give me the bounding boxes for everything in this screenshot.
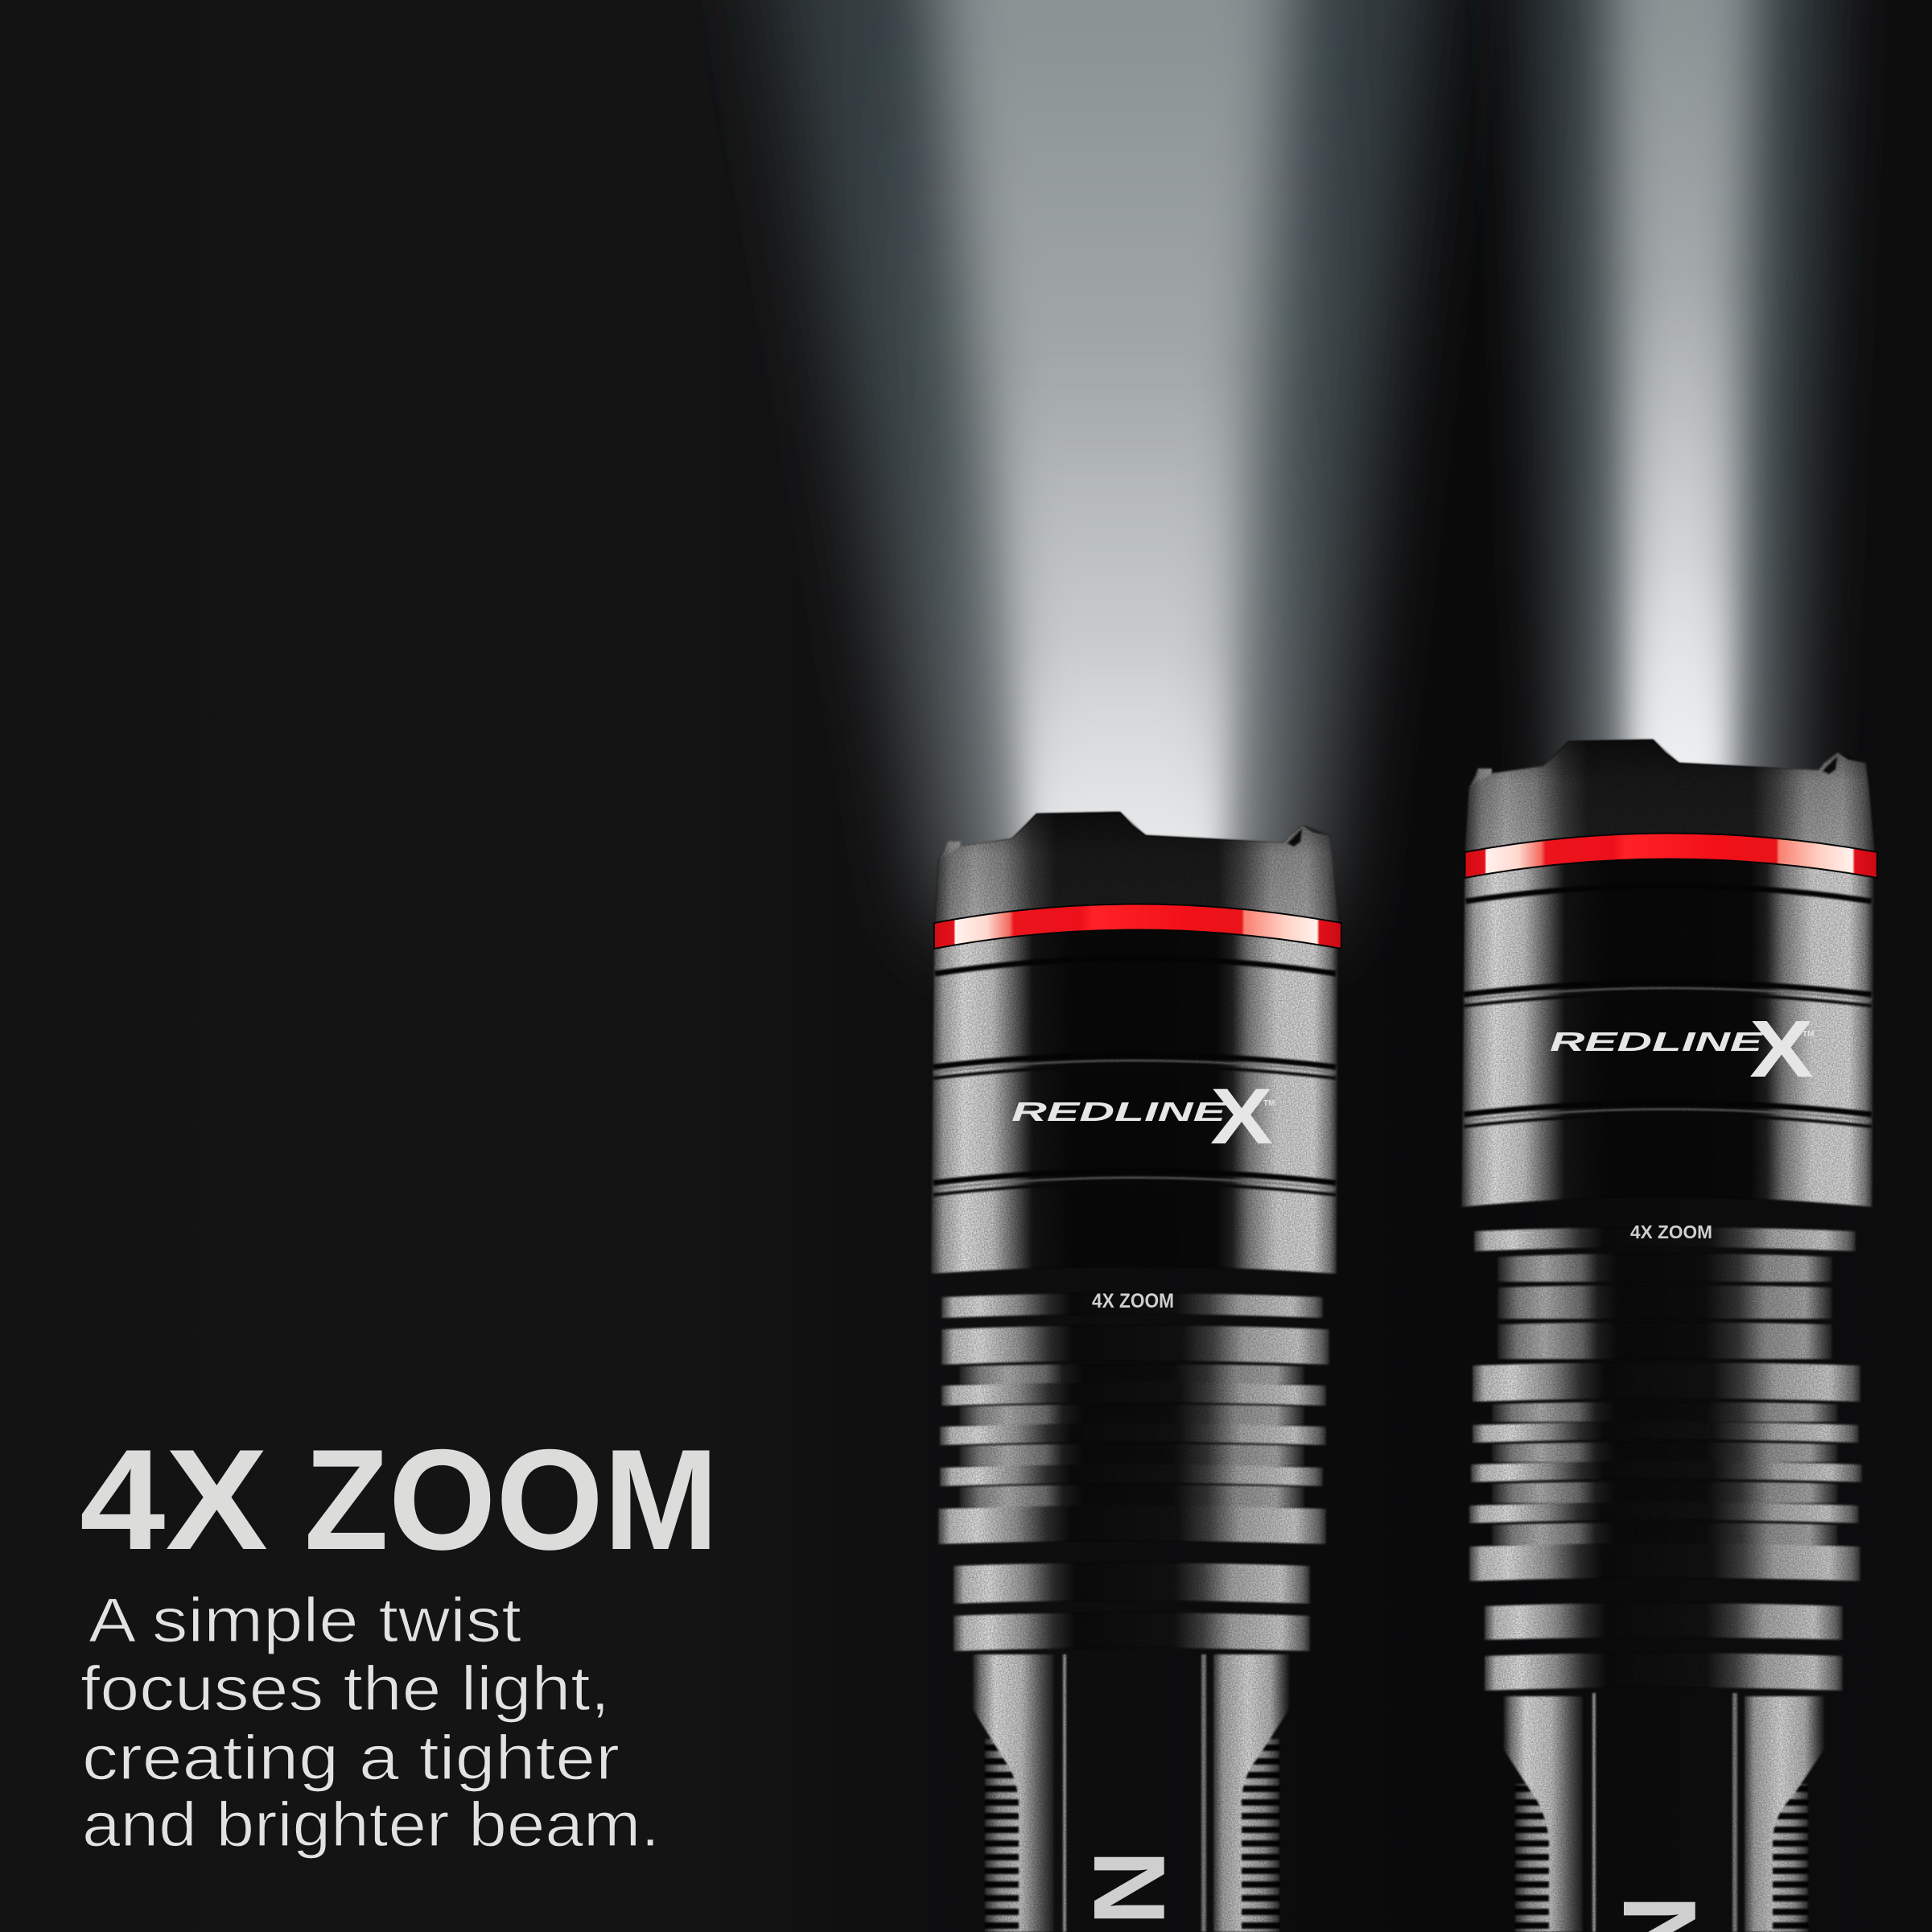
- body text: A simple twist: [89, 1584, 521, 1655]
- brand mark on handle: left: N: [1073, 1850, 1186, 1926]
- logo: REDLINE X, right: X: [1749, 1004, 1814, 1094]
- title: ZOOM: [304, 1419, 719, 1580]
- body text: focuses the light,: [80, 1653, 610, 1724]
- flashlight: right, focused beam: [1461, 739, 1877, 1932]
- flashlight head: right: [1461, 739, 1876, 1207]
- flashlight head: left: [931, 812, 1340, 1274]
- head grooves: right: [1464, 886, 1872, 1127]
- light beam: focused flashlight: [1513, 0, 1847, 845]
- head grooves: left: [933, 958, 1336, 1195]
- logo: REDLINE X, right: TM: [1802, 1030, 1814, 1039]
- logo: REDLINE X, left: X: [1210, 1072, 1273, 1160]
- red ring: left: [934, 904, 1341, 949]
- title: [80, 1419, 719, 1580]
- light beam: wide flashlight: [728, 0, 1464, 925]
- handle grip bars: right: [1503, 1693, 1825, 1932]
- body text: and brighter beam.: [82, 1789, 660, 1860]
- engraved label: 4X ZOOM, left: 4X ZOOM: [1092, 1290, 1174, 1312]
- engraved label: 4X ZOOM, right: 4X ZOOM: [1630, 1221, 1712, 1242]
- logo: REDLINE X, left: [1011, 1072, 1275, 1160]
- red ring: right: [1465, 834, 1877, 878]
- title: 4X: [80, 1419, 268, 1580]
- logo: REDLINE X, right: REDLINE: [1550, 1027, 1764, 1057]
- body text: [80, 1584, 660, 1860]
- handle grip bars: left: [972, 1654, 1290, 1932]
- handle knurling: right: [1515, 1784, 1808, 1932]
- ribbed collar: right: [1469, 1227, 1862, 1691]
- logo: REDLINE X, left: TM: [1263, 1099, 1275, 1108]
- body text: creating a tighter: [82, 1722, 620, 1793]
- ribbed collar: left: [938, 1293, 1329, 1651]
- handle knurling: left: [985, 1739, 1279, 1932]
- logo: REDLINE X, left: REDLINE: [1011, 1097, 1227, 1127]
- logo: REDLINE X, right: [1550, 1004, 1814, 1094]
- flashlight: left, wide beam: [931, 812, 1341, 1932]
